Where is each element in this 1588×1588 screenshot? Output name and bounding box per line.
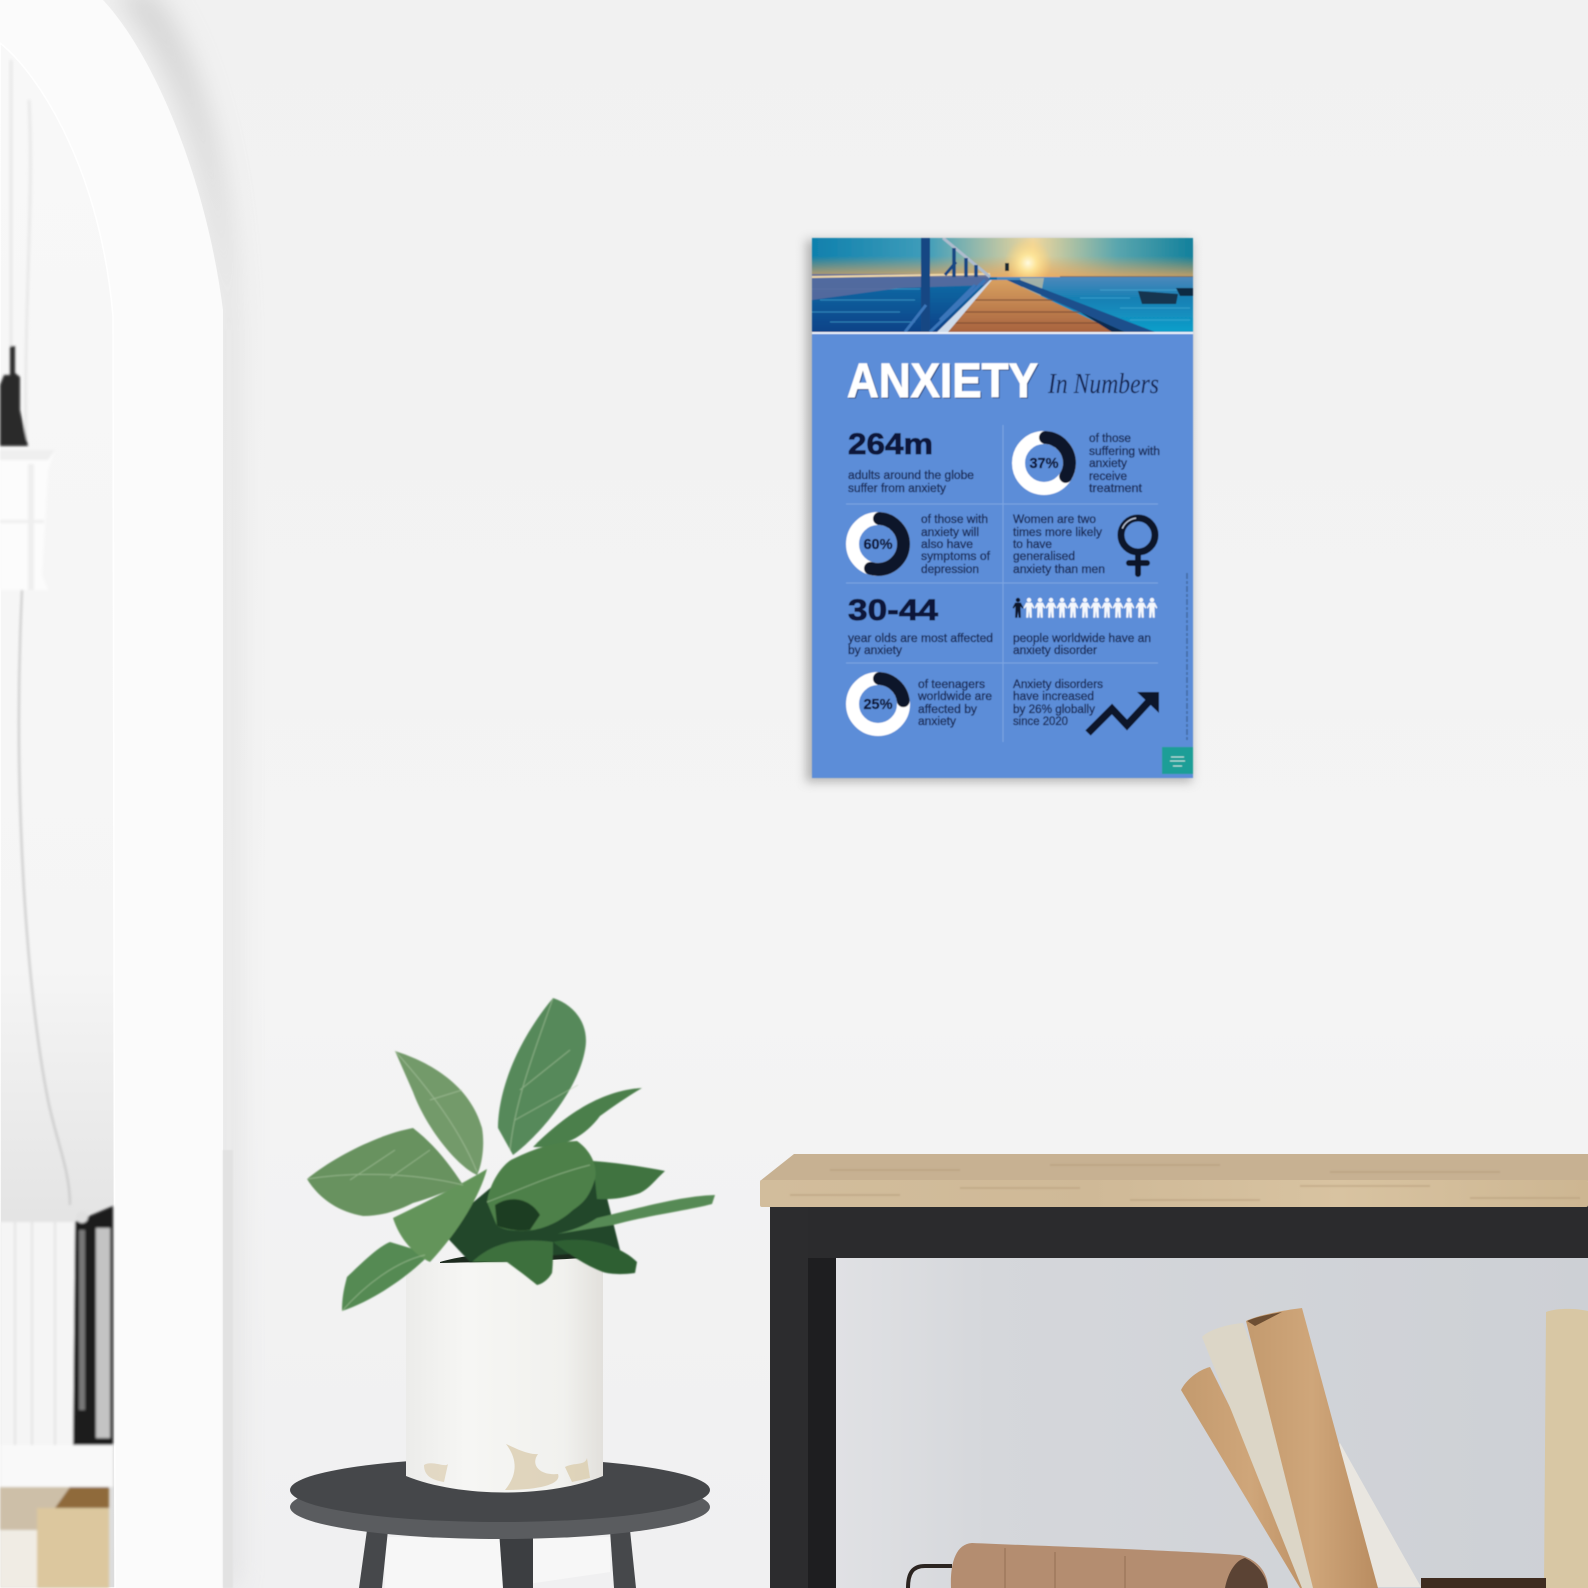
stat: 25% donut: 25% (863, 697, 893, 713)
sunset pier photo (812, 238, 1193, 332)
stat: 25% donut (852, 678, 904, 730)
stat: 30-44: by anxiety (848, 645, 902, 657)
text: 60% description: symptoms of (921, 551, 991, 563)
text: 37% description: suffering with (1089, 446, 1160, 458)
poster background panel (812, 238, 1193, 778)
text: women more likely: anxiety than men (1013, 564, 1105, 576)
text: 37% description: of those (1089, 433, 1131, 445)
white arched column (0, 0, 233, 1588)
text: 37% description: receive (1089, 471, 1127, 483)
white plant pot (406, 1251, 603, 1492)
rolled paper tubes (1181, 1308, 1588, 1588)
text: 37% description: anxiety (1089, 458, 1127, 470)
text: 25% description: affected by (918, 704, 977, 716)
text: women more likely (1013, 514, 1105, 576)
console table (760, 1154, 1588, 1588)
text: women more likely: to have (1013, 539, 1052, 551)
leather bag (908, 1543, 1268, 1588)
text: 60% description: anxiety will (921, 527, 979, 539)
stat: 37% donut: 37% (1029, 456, 1059, 472)
text: women more likely: generalised (1013, 551, 1075, 563)
stat: 30-44: year olds are most affected (848, 633, 993, 645)
stat: 264m: suffer from anxiety (848, 483, 946, 495)
text: 37% description (1089, 433, 1160, 495)
text: disorders increased: Anxiety disorders (1013, 679, 1103, 691)
text: 25% description: of teenagers (918, 679, 985, 691)
arch niche (0, 43, 115, 1588)
stat: 60% donut (852, 518, 904, 570)
stat: 264m: 264m (848, 428, 933, 461)
text: people worldwide: anxiety disorder (1013, 645, 1097, 657)
text: disorders increased: by 26% globally (1013, 704, 1095, 716)
stat: 264m: adults around the globe (848, 470, 974, 482)
text: women more likely: times more likely (1013, 527, 1102, 539)
stool (290, 1458, 710, 1588)
grid dividers (846, 425, 1158, 742)
text: people worldwide: people worldwide have an (1013, 633, 1151, 645)
text: 25% description (917, 679, 992, 728)
text: disorders increased: have increased (1013, 691, 1094, 703)
photo white divider (812, 332, 1193, 334)
stat: 264m (848, 428, 974, 495)
plant leaves (307, 998, 715, 1311)
stat: 30-44: 30-44 (848, 594, 938, 627)
title: ANXIETY (847, 355, 1038, 408)
text: 25% description: worldwide are (917, 691, 992, 703)
stat: 37% donut (1018, 438, 1070, 488)
arch shadow on wall (112, 0, 234, 1588)
text: women more likely: Women are two (1013, 514, 1096, 526)
icon: rising arrow (1088, 692, 1159, 733)
text: 25% description: anxiety (918, 716, 956, 728)
text: people worldwide (1013, 633, 1151, 657)
poster (812, 238, 1193, 778)
text: disorders increased (1013, 679, 1103, 728)
bookshelf in niche (0, 1206, 113, 1588)
icon: row of people (1013, 598, 1157, 618)
text: 60% description: also have (921, 539, 973, 551)
poster shadow (806, 240, 1192, 782)
text: 37% description: treatment (1089, 483, 1143, 495)
icon: female symbol (1121, 518, 1155, 574)
text: 60% description: depression (921, 564, 979, 576)
subtitle: In Numbers (1047, 368, 1159, 400)
text: 60% description: of those with (921, 514, 988, 526)
stat: 60% donut: 60% (863, 537, 893, 553)
stat: 30-44 (848, 594, 993, 657)
text: 60% description (921, 514, 991, 576)
pendant lamp (0, 60, 70, 1205)
text: disorders increased: since 2020 (1013, 716, 1068, 728)
teal logo badge (1162, 747, 1193, 774)
vertical fine print (1186, 573, 1188, 740)
